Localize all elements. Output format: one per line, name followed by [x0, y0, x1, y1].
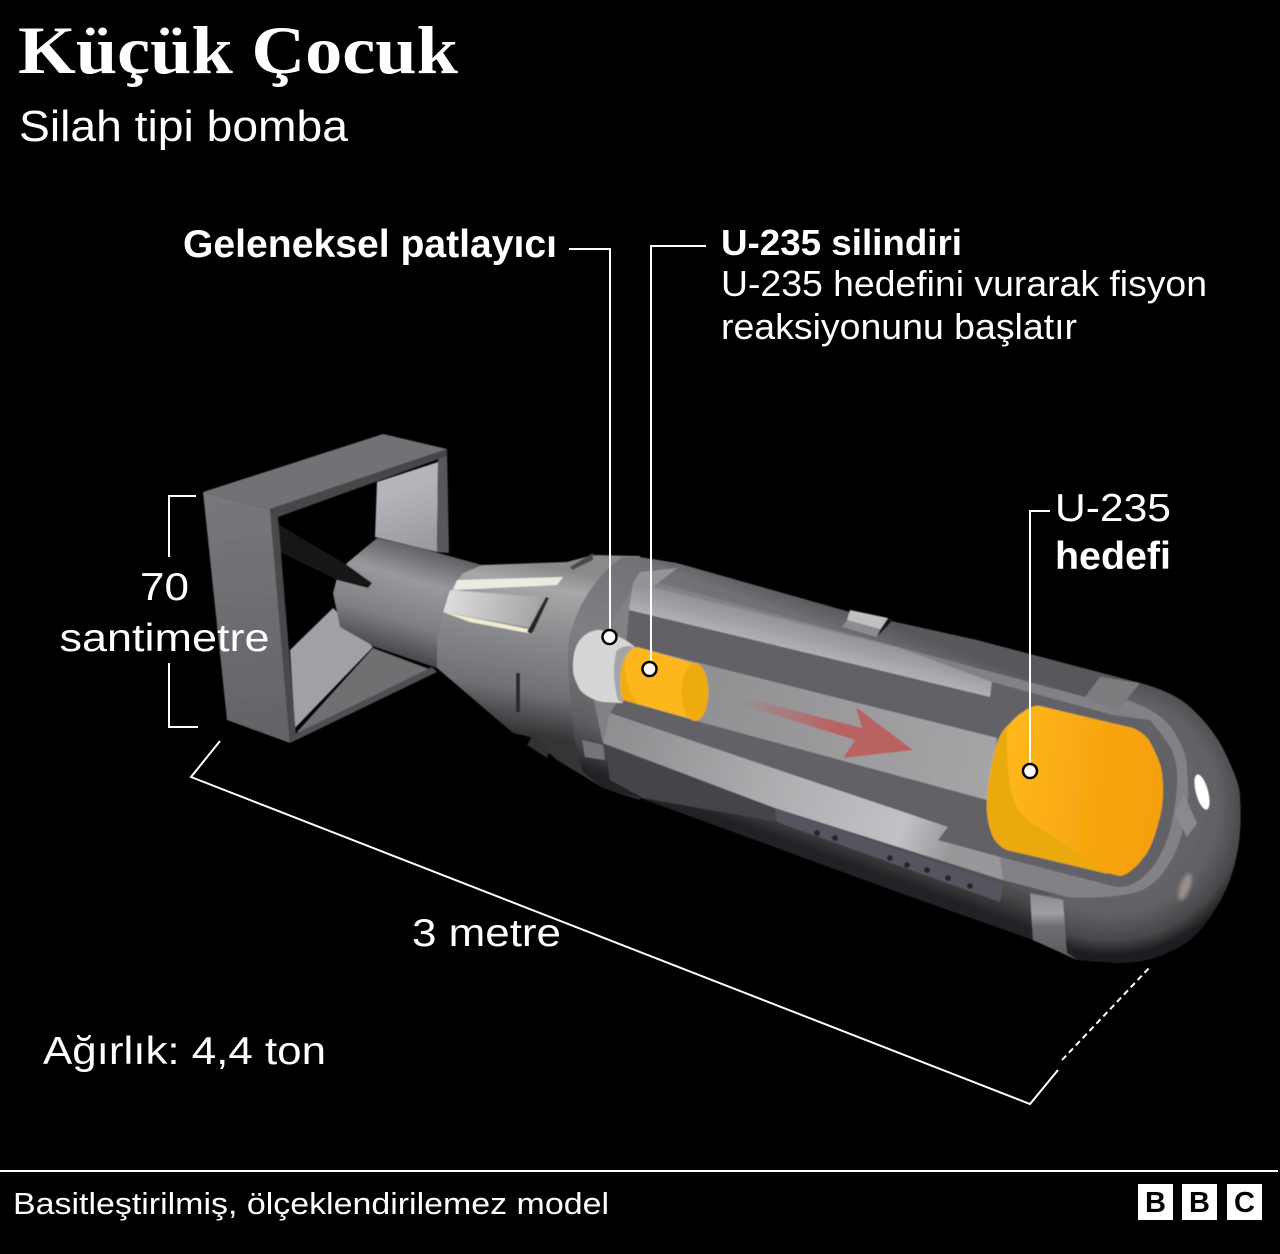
body bands	[582, 568, 1140, 960]
latch	[842, 610, 893, 637]
nose reflections	[1175, 773, 1212, 902]
cutaway light channel	[623, 647, 997, 800]
U-235 target	[987, 706, 1163, 876]
lower panel with rivets	[775, 808, 1003, 902]
rounded nose	[1040, 677, 1240, 963]
main body casing	[568, 557, 1240, 963]
label: U-235 target	[1055, 487, 1171, 578]
footer note: Basitleştirilmiş, ölçeklendirilemez model	[13, 1186, 609, 1221]
U-235 cylinder	[620, 647, 708, 721]
label: conventional explosive: Geleneksel patlayıcı	[183, 223, 557, 266]
dimension: width bracket	[60, 496, 270, 727]
leader: U-235 target	[1023, 511, 1050, 778]
cutaway lower light band	[603, 713, 1003, 880]
title: Küçük Çocuk	[18, 12, 458, 88]
label: U-235 cylinder description: U-235 silindiri	[721, 222, 962, 263]
label: U-235 target: hedefi	[1055, 535, 1171, 578]
inner hull	[585, 578, 1188, 898]
tail cylinder	[333, 538, 482, 668]
subtitle: Silah tipi bomba	[19, 102, 349, 151]
bomb illustration	[203, 434, 1240, 963]
conventional explosive	[573, 630, 636, 703]
label: U-235 cylinder description: reaksiyonunu başlatır	[721, 306, 1077, 347]
tail box fin back	[290, 449, 449, 743]
nose cone section	[437, 553, 640, 800]
label: U-235 cylinder description: U-235 hedefini vurarak fisyon	[721, 263, 1207, 304]
weight label: Ağırlık: 4,4 ton	[43, 1030, 326, 1073]
BBC logo	[1138, 1184, 1262, 1220]
lower hull dark strip	[605, 745, 777, 822]
tail box fin front	[203, 434, 447, 743]
dimension: width bracket: 70	[140, 566, 189, 609]
BBC logo: C	[1234, 1187, 1255, 1219]
label: U-235 cylinder description	[721, 222, 1207, 347]
tail strut	[278, 524, 372, 588]
cutaway dark casing	[610, 610, 1177, 887]
leader: conventional explosive	[569, 249, 616, 644]
motion arrow	[735, 695, 913, 758]
dimension: length bracket	[191, 741, 1150, 1104]
leader: U-235 cylinder	[642, 246, 706, 676]
label: U-235 target: U-235	[1055, 487, 1171, 530]
BBC logo: B	[1145, 1187, 1166, 1219]
BBC logo: B	[1189, 1187, 1210, 1219]
cutaway upper light band	[629, 583, 992, 697]
dimension: width bracket: santimetre	[60, 617, 270, 660]
footer rule	[0, 1170, 1278, 1172]
dimension: length bracket: 3 metre	[412, 912, 561, 955]
